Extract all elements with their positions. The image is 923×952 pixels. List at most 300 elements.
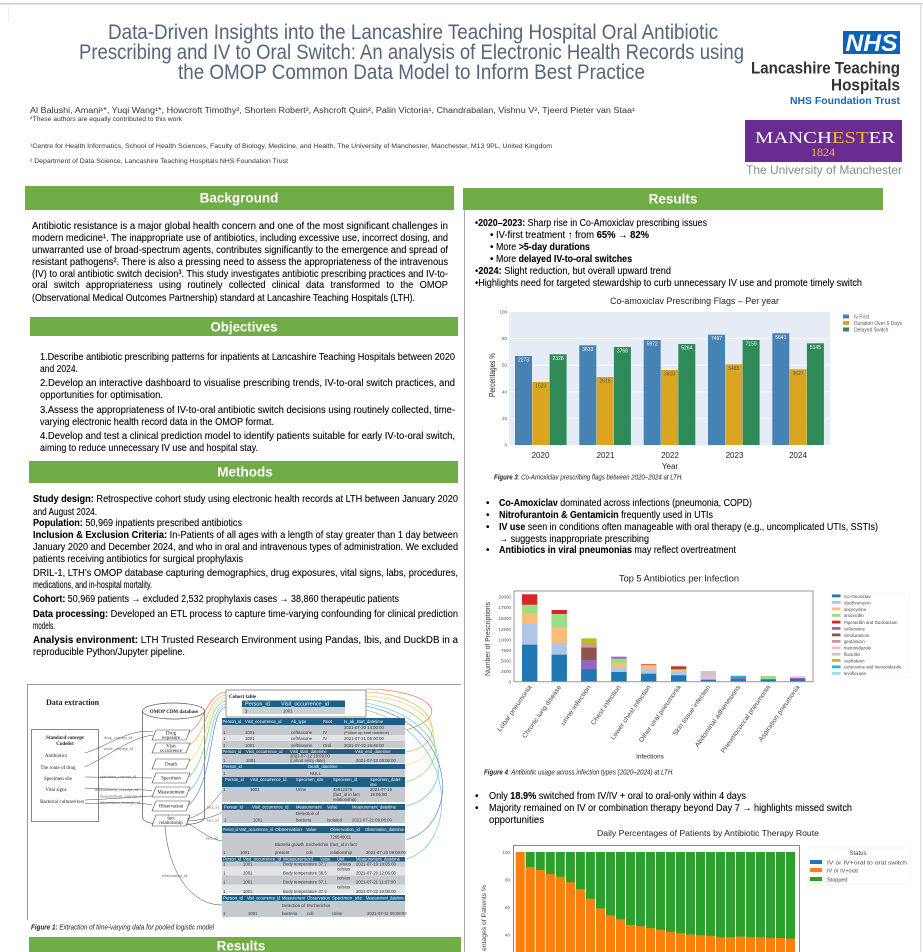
table: vital signs: 2021-07-21 11:07:00: [356, 880, 396, 884]
legend: nitrofurantoin: [844, 633, 870, 638]
bar value labels: 7159: [746, 342, 757, 348]
table: measurement: 1: [224, 818, 227, 822]
table: bacterial culture: [222, 895, 407, 917]
x axis labels: Skin tissue infection: [672, 684, 712, 737]
x axis labels: Aspiration pneumonia: [757, 684, 802, 743]
bar value labels: 5485: [728, 366, 740, 372]
cohort table: Visit_occurrence_id: [281, 702, 329, 708]
x axis labels: Lobar pneumonia: [496, 684, 534, 733]
figure 3 caption: Figure 3: Co-Amoxiclav prescribing flags between 2020–2024 at LTH.: [494, 474, 683, 482]
methods text: patients receiving antibiotics for surgical prophylaxis: [33, 554, 243, 565]
results summary text: IV-first treatment ↑ from 65% → 82%: [496, 230, 649, 241]
OMOP CDM database cylinder: Visit: [166, 744, 176, 750]
table: drug exposure: ceftriaxone: [291, 743, 313, 748]
table: observation: Bacteria growth: [275, 842, 305, 847]
y axis: 0: [508, 680, 511, 684]
objectives text: [40, 352, 455, 454]
table: specimen: 19:05:00: [370, 792, 387, 797]
table: measurement: Measurement: [296, 804, 322, 810]
infection usage bullet points: → suggests inappropriate prescribing: [499, 534, 649, 545]
background text: Antibiotic resistance is a major global health concern and one of the most significant challenges in: [32, 221, 448, 232]
infection usage bullet points: Nitrofurantoin & Gentamicin frequently used in UTIs: [499, 510, 713, 521]
table: visit occurrence: Person_id: [222, 749, 242, 754]
results summary text: •: [490, 254, 494, 265]
concept id labels: measurement_concept_id: [95, 787, 139, 792]
authors: [30, 106, 635, 123]
logo: NHS Lancashire Teaching Hospitals: Hospitals: [831, 76, 900, 94]
y axis: 40: [505, 932, 510, 938]
bars: [515, 333, 824, 445]
legend: gentamicin: [844, 639, 865, 644]
table: bacterial culture: coli: [307, 911, 313, 916]
stacked bars: [522, 594, 805, 682]
table: measurement: Measurement_datetime: [352, 804, 397, 810]
logo: University of Manchester: [745, 120, 902, 177]
table: death: NULL: [310, 771, 322, 776]
y axis: 40: [502, 389, 507, 394]
results summary text: [475, 218, 862, 289]
y axis: 12500: [498, 627, 511, 632]
table: vital signs: celsius: [337, 876, 350, 880]
table: vital signs: Person_id: [223, 856, 242, 862]
background text: oral switch appropriateness using routinely collected clinical data transformed to the OMOP: [32, 280, 448, 291]
table: bacterial culture: Specimen_site: [332, 896, 363, 900]
switch therapy bullet points: opportunities: [489, 815, 544, 826]
infection usage bullet points: •: [486, 522, 490, 533]
concept id labels: observation_concept_id: [100, 800, 141, 805]
table: specimen: 1001: [250, 787, 260, 792]
diagram heading: Data extraction: [46, 698, 100, 707]
chart title: Co-amoxiclav Prescribing Flags – Per year: [610, 296, 779, 307]
table: death: [222, 764, 405, 777]
objectives text: aiming to reduce unnecessary IV use and hospital stay.: [40, 443, 258, 454]
table: drug exposure: Person_id: [222, 719, 242, 724]
infection usage bullet points: Co-Amoxiclav dominated across infections (pneumonia, COPD): [499, 498, 752, 509]
x axis labels: [496, 683, 802, 754]
OMOP CDM database cylinder: Specimen: [161, 776, 181, 782]
concept id labels: specimen_concept_id: [100, 774, 137, 779]
table: visit occurrence: 2021-07-23 09:08:00: [356, 758, 397, 763]
bar value labels: 2618: [600, 378, 611, 384]
table: bacterial culture: Escherichia: [307, 903, 331, 908]
infection usage bullet points: Antibiotics in viral pneumonias may reflect overtreatment: [499, 545, 736, 556]
OMOP CDM database cylinder: exposure: [162, 736, 181, 741]
bar value labels: 5972: [647, 342, 658, 348]
y axis: 2500: [501, 669, 511, 674]
y axis: 100: [499, 310, 507, 314]
legend: cephalexin: [844, 658, 865, 663]
table: drug exposure: 1001: [245, 736, 255, 741]
y axis: 20: [502, 416, 507, 421]
switch therapy bullet points: •: [475, 791, 479, 802]
legend: Iv First: [854, 314, 870, 320]
table: observation: (fact_id in fact: [330, 842, 358, 847]
x axis title: Infections: [636, 754, 665, 760]
table: vital signs: Celsius: [337, 862, 351, 866]
table: specimen: 2021-07-19: [370, 787, 393, 792]
y axis: 7500: [501, 648, 511, 653]
standard concept codelist box: Specimen site: [44, 777, 73, 782]
results summary text: More >5-day durations: [496, 242, 590, 253]
standard concept codelist box: Vital signs: [45, 788, 67, 793]
legend: metronidazole: [844, 646, 872, 651]
table: specimen: ime: [370, 782, 377, 787]
table: drug exposure: Ab_type: [291, 719, 307, 724]
standard concept codelist box: Standard concept: [46, 736, 84, 741]
x axis: [532, 451, 807, 471]
table: observation: present: [275, 850, 290, 855]
y axis: 100: [502, 850, 510, 855]
table: observation: Observation: [275, 827, 303, 832]
table: vital signs: 1: [223, 870, 226, 876]
table: vital signs: Measurement_datetime: [356, 856, 401, 862]
legend: clarithromycin: [844, 600, 871, 605]
background text: resistant pathogens². There is also a pressing need to assess the appropriateness of the intravenous: [32, 257, 448, 268]
title: Prescribing and IV to Oral Switch: An analysis of Electronic Health Records using: [79, 41, 744, 64]
x axis: 2021: [597, 451, 615, 460]
results summary text: •: [490, 242, 494, 253]
legend: Co-Amoxiclav: [844, 594, 871, 599]
legend: Duration Over 5 Days: [854, 321, 903, 327]
panel: lower results heading: [29, 937, 461, 952]
bar value labels: [518, 335, 821, 390]
bar value labels: 3627: [793, 371, 804, 377]
concept id labels: route_concept_id: [104, 746, 134, 751]
cohort table: Cohort table: [229, 695, 257, 700]
OMOP CDM database cylinder: Drug: [166, 732, 177, 736]
table: measurement: 2021-07-21 09:08:00: [352, 818, 393, 822]
table: specimen: Visit_occurrence_id: [250, 777, 287, 782]
table: specimen: 45812378: [333, 787, 353, 792]
table: vital signs: celsius: [337, 884, 350, 890]
standard concept codelist box: Bacterial cultured test: [40, 800, 85, 805]
panel: background heading: Background: [200, 190, 278, 206]
table: measurement: 1001: [253, 818, 263, 822]
y axis: 5000: [501, 658, 511, 664]
table: drug exposure: 1001: [245, 743, 255, 748]
panel: results heading: Results: [649, 192, 697, 206]
table: observation: 726548011: [330, 834, 352, 840]
infection usage bullet points: •: [486, 498, 490, 509]
concept id labels: fact_id: [207, 818, 220, 822]
table: observation: 1: [223, 850, 226, 855]
table: vital signs: Value: [320, 856, 331, 862]
y axis: 17500: [498, 605, 511, 610]
table: drug exposure: 1: [223, 743, 226, 748]
table: drug exposure: [222, 718, 405, 748]
table: drug exposure: IV: [323, 736, 327, 741]
table: specimen: (fact_id in fact: [333, 792, 361, 797]
bar value labels: 5145: [810, 345, 821, 351]
logo: University of Manchester: The University of Manchester: [746, 163, 902, 177]
table: observation: Observation_id: [330, 827, 361, 832]
y axis: 60: [502, 363, 507, 368]
table: observation: Escherichia: [306, 842, 329, 847]
standard concept codelist box: [32, 730, 98, 822]
authors: *These authors are equally contributed to this work: [30, 117, 183, 123]
table: drug exposure: IV: [323, 730, 327, 735]
table: measurement: Detection of: [296, 811, 320, 816]
bar value labels: 5264: [681, 346, 693, 352]
legend: doxycycline: [844, 607, 867, 612]
y axis: entages of Patients %: [481, 885, 488, 951]
y axis: 80: [502, 336, 507, 341]
methods text: Analysis environment: LTH Trusted Research Environment using Pandas, Ibis, and DuckDB in a: [33, 635, 458, 646]
panel: methods heading: Methods: [217, 464, 273, 480]
chart: top 5 antibiotics per infection: [485, 574, 909, 760]
OMOP CDM database cylinder: Death: [165, 762, 177, 768]
table: bacterial culture: 1: [223, 911, 226, 916]
cohort table: 1: [245, 708, 248, 714]
bar value labels: 5641: [775, 335, 787, 341]
table: visit occurrence: [222, 749, 405, 763]
table: vital signs: Measurement: [283, 856, 314, 862]
table: bacterial culture: bacteria: [282, 911, 298, 916]
table: vital signs: Body temperature 37.2: [283, 889, 327, 894]
y axis: 60: [505, 905, 510, 910]
table: specimen: Specimen_id: [333, 777, 358, 782]
title: Data-Driven Insights into the Lancashire Teaching Hospital Oral Antibiotic: [108, 21, 718, 44]
bar value labels: 3633: [582, 347, 594, 353]
y axis: [485, 594, 511, 684]
table: visit occurrence: (cohort entry date): [290, 758, 326, 763]
results summary text: •2020–2023: Sharp rise in Co-Amoxiclav prescribing issues: [475, 218, 707, 229]
table: visit occurrence: 2021-07-12 19:09:00: [290, 754, 331, 758]
y axis: 20000: [498, 594, 511, 600]
table: vital signs: 2021-07-19 18:05:00: [356, 862, 397, 866]
methods text: Population: 50,969 inpatients prescribed antibiotics: [33, 518, 242, 529]
table: measurement: Isolated: [327, 818, 343, 822]
x axis labels: Lower chest infection: [610, 684, 653, 741]
table: drug exposure: Root: [323, 719, 333, 724]
table: drug exposure: Oral: [323, 743, 331, 748]
panel: objectives heading: Objectives: [210, 320, 278, 334]
table: vital signs: 1001: [243, 889, 253, 894]
affiliations: ² Department of Data Science, Lancashire Teaching Hospitals NHS Foundation Trust: [30, 158, 288, 165]
standard concept codelist box: Codelist: [56, 742, 74, 747]
table: vital signs: Body temperature 38.5: [283, 870, 327, 876]
table: bacterial culture: 2021-07-11 09:08:00: [367, 911, 407, 916]
table: bacterial culture: 1001: [248, 911, 258, 916]
background text: modern medicine¹. The inappropriate use of antibiotics, including excessive use, incorrect dosing, and: [32, 233, 448, 244]
panel: objectives heading: [30, 317, 458, 336]
OMOP CDM database cylinder: occurrence: [160, 749, 183, 754]
legend: cefuroxime and metronidazole: [844, 665, 902, 670]
objectives text: opportunities for optimisation.: [40, 390, 163, 401]
background text: (Observational Medical Outcomes Partnership) standard at Lancashire Teaching Hospitals (LTH).: [32, 293, 415, 304]
table: drug exposure: 2021-07-22 16:46:00: [344, 743, 385, 748]
table: measurement: Value: [327, 804, 338, 810]
legend: [831, 593, 909, 678]
OMOP CDM database cylinder: relationship: [159, 821, 183, 826]
table: vital signs: 1: [223, 880, 226, 884]
objectives text: 1.Describe antibiotic prescribing patterns for inpatients at Lancashire Teaching Hospitals between 2020: [40, 352, 455, 363]
table: drug exposure: 2021-07-20 14:00:00: [344, 725, 385, 730]
figure 4 caption: Figure 4: Antibiotic usage across infection types (2020–2024) at LTH.: [484, 770, 674, 776]
table: specimen: Specimen_site: [296, 777, 324, 782]
table: vital signs: 2021-07-22 10:08:00: [356, 889, 397, 894]
table: vital signs: 1: [223, 889, 226, 894]
methods text: reproducible Python/Jupyter pipeline.: [33, 647, 185, 658]
logo: NHS Lancashire Teaching Hospitals: NHS Foundation Trust: [790, 95, 900, 107]
x axis labels: Other viral pneumonia: [638, 684, 683, 744]
OMOP CDM database cylinder: Measurement: [157, 790, 185, 796]
table: bacterial culture: Observation: [307, 896, 331, 900]
table: specimen: 1: [223, 787, 226, 792]
table: specimen: Urine: [296, 787, 307, 792]
table: measurement: Person_id: [224, 804, 244, 810]
infection usage bullet points: •: [486, 545, 490, 556]
OMOP CDM database cylinder: [142, 703, 204, 826]
table: vital signs: 2021-07-20 12:06:00: [356, 870, 397, 876]
bar value labels: 7497: [711, 336, 722, 342]
cohort table: 1001: [283, 708, 293, 714]
table: death: Person_id: [223, 764, 243, 769]
table: bacterial culture: Visit_occurrence_id: [247, 896, 281, 900]
affiliations: [30, 143, 552, 165]
table: observation: relationship: [330, 850, 353, 855]
standard concept codelist box: Antibiotics: [45, 754, 67, 759]
x axis: 2022: [661, 451, 679, 460]
x axis: 2024: [789, 451, 807, 460]
switch therapy bullet points: Only 18.9% switched from IV/IV + oral to oral-only within 4 days: [489, 791, 746, 802]
table: drug exposure: ceftriaxone: [291, 736, 313, 741]
concept id labels: measurement_concept_id: [100, 794, 144, 798]
table: observation: [222, 826, 407, 856]
methods text: Data processing: Developed an ETL process to capture time-varying confounding for clinical prediction: [33, 609, 458, 620]
methods text: models.: [33, 621, 55, 632]
legend: IV or IV+oral to oral switch: [827, 860, 907, 866]
x axis labels: Chronic lung disease: [521, 684, 563, 740]
methods text: Cohort: 50,969 patients → excluded 2,532 prophylaxis cases → 38,860 therapeutic patients: [33, 594, 399, 605]
table: drug exposure: 1: [223, 730, 226, 735]
concept id labels: fact_id: [206, 836, 219, 840]
cohort table: Person_id: [245, 702, 270, 708]
legend: cefuroxime: [844, 626, 866, 631]
OMOP CDM database cylinder: Observation: [159, 804, 184, 810]
table: visit occurrence: Visit_end_datetime: [355, 749, 391, 754]
x axis labels: urine infection: [560, 684, 593, 727]
x axis: Year: [662, 462, 678, 471]
logo: NHS Lancashire Teaching Hospitals: [751, 30, 900, 107]
table: specimen: [222, 777, 405, 802]
OMOP CDM database cylinder: OMOP CDM database: [150, 710, 199, 715]
panel: methods heading: [29, 461, 458, 483]
infection usage bullet points: •: [486, 510, 490, 521]
table: vital signs: Visit_occurrence_id: [243, 856, 282, 862]
objectives text: and 2024.: [40, 364, 78, 375]
infection usage bullet points: IV use seen in conditions often manageable with oral therapy (e.g., uncomplicated UTIs, SSTIs): [499, 522, 878, 533]
bar value labels: 3768: [617, 348, 628, 354]
logo: NHS Lancashire Teaching Hospitals: Lancashire Teaching: [751, 58, 900, 78]
standard concept codelist box: The route of drug: [40, 766, 76, 771]
table: measurement: Visit_occurrence_id: [252, 804, 289, 810]
figure 1 caption: Figure 1: Extraction of time-varying data for pooled logistic model: [31, 924, 214, 932]
table: vital signs: 1001: [243, 862, 253, 866]
table: observation: Person_id: [223, 827, 239, 832]
table: drug exposure: 1: [223, 736, 226, 741]
table: visit occurrence: Visit_occurrence_id: [246, 749, 283, 754]
table: vital signs: Body temperature 37.1: [283, 880, 327, 884]
table: drug exposure: (Follow up start datetime): [344, 730, 390, 735]
table: vital signs: [222, 856, 405, 894]
y axis: [481, 850, 510, 951]
table: visit occurrence: 1: [223, 758, 226, 763]
table: drug exposure: 2021-07-21 05:00:00: [344, 736, 385, 741]
table: drug exposure: Iv_ab_start_datetime: [344, 719, 384, 724]
concept id arrows: [85, 731, 223, 905]
x axis labels: Pneumococcal pneumonia: [720, 684, 772, 754]
legend: Delayed Switch: [854, 328, 889, 334]
methods text: and August 2024.: [33, 507, 97, 518]
OMOP CDM database cylinder: fact: [167, 816, 175, 822]
objectives text: varying electronic health record data in the OMOP format.: [40, 417, 274, 428]
results summary text: More delayed IV-to-oral switches: [496, 254, 632, 265]
legend: IV or IV+oral: [827, 868, 858, 874]
legend: flixacillin: [844, 652, 861, 657]
concept id labels: fact_id: [207, 804, 220, 810]
x axis labels: Chest infection: [590, 684, 623, 727]
logo: University of Manchester: MANCH EST ER: [755, 128, 896, 147]
table: observation: Value: [306, 827, 317, 832]
table: death: 1: [223, 771, 226, 776]
chart title: Daily Percentages of Patients by Antibiotic Therapy Route: [597, 828, 819, 838]
table: vital signs: Body temperature 37.7: [283, 862, 327, 866]
table: bacterial culture: Urine: [332, 911, 343, 916]
background text: unwarranted use of broad-spectrum agents, contributes significantly to the emergence and spread of: [32, 245, 448, 256]
chart title: Top 5 Antibiotics per Infection: [619, 574, 739, 584]
table: vital signs: Unit: [337, 856, 345, 862]
table: specimen: relationship): [333, 797, 357, 802]
chart: co-amoxiclav prescribing flags: [488, 296, 903, 471]
background text: [32, 221, 448, 304]
legend: Stopped: [827, 878, 848, 884]
table: specimen: Person_id: [225, 777, 245, 782]
x axis: 2023: [726, 451, 744, 460]
methods text: [33, 494, 458, 658]
coloured linkage curves: [188, 689, 443, 859]
objectives text: 2.Develop an interactive dashboard to visualise prescribing trends, IV-to-oral switch practices, and: [40, 378, 455, 389]
table: drug exposure: ceftriaxone: [291, 730, 313, 735]
concept id labels: [95, 735, 220, 878]
table: vital signs: 1001: [243, 880, 253, 884]
legend: Status: [849, 851, 867, 857]
authors: Al Balushi, Amani¹*, Yuqi Wang¹*, Howcroft Timothy², Shorten Robert², Ashcroft Quin², Palin Victoria¹, Chandrabalan, Vishnu V², Tjeerd Pieter van Staa¹: [30, 106, 635, 115]
panel: background heading: [25, 186, 454, 210]
title: the OMOP Common Data Model to Inform Best Practice: [178, 61, 645, 84]
objectives text: 4.Develop and test a clinical prediction model to identify patients suitable for early IV-to-oral switch,: [40, 431, 455, 442]
x axis labels: Abdominal adhenesions: [694, 683, 743, 749]
table: specimen: Specimen_datet: [370, 777, 401, 782]
table: visit occurrence: 1001: [246, 758, 256, 763]
y axis: Number of Prescriptions: [485, 602, 492, 676]
table: vital signs: celsius: [337, 866, 350, 872]
bar value labels: 3910: [664, 372, 675, 378]
panel: results heading: [463, 188, 883, 210]
table: observation: 2021-07-23 09:08:00: [366, 850, 407, 855]
infection usage bullet points: [486, 498, 878, 556]
table: observation: 1001: [240, 850, 250, 855]
bar value labels: 2328: [553, 356, 564, 362]
figure 1: data extraction diagram: [27, 684, 461, 920]
switch therapy bullet points: •: [475, 803, 479, 814]
table: drug exposure: Visit_occurrence_id: [245, 719, 282, 724]
legend: amoxicillin: [844, 613, 864, 618]
title: [79, 21, 744, 84]
table: drug exposure: 1001: [245, 730, 255, 735]
table: vital signs: 1001: [243, 870, 253, 876]
affiliations: ¹Centre for Health Informatics, School of Health Sciences, Faculty of Biology, Medicine, and Health, The University of Manchester, Manchester, M13 9PL, United Kingdom: [30, 143, 552, 150]
